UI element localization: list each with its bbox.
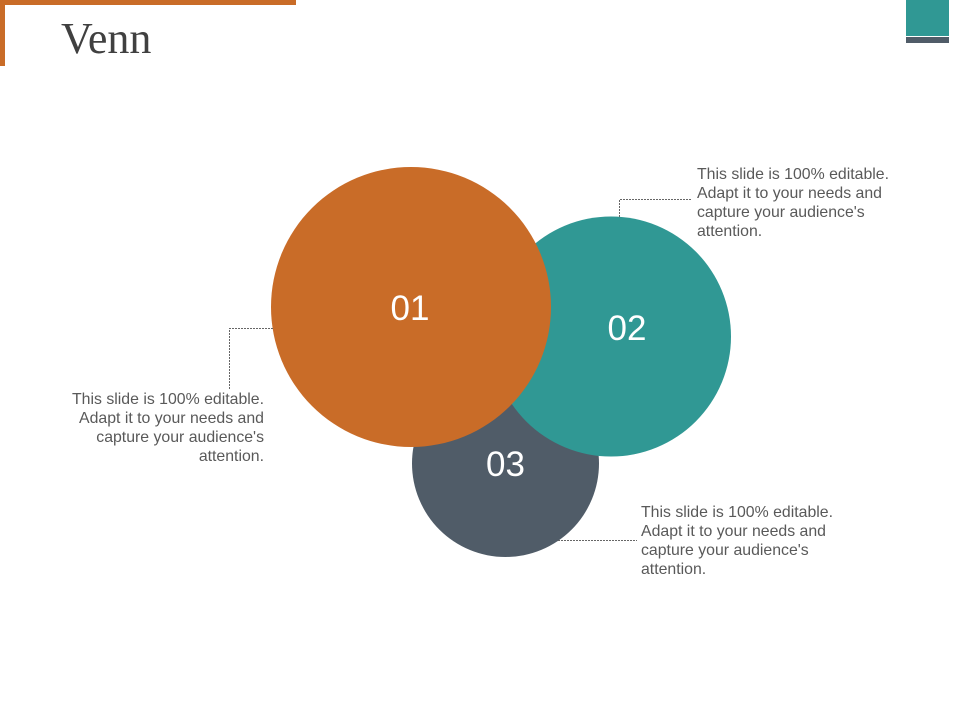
text block 02: This slide is 100% editable.	[697, 166, 889, 183]
circle 02	[491, 216, 731, 456]
text block 03: Adapt it to your needs and	[641, 523, 826, 540]
connector 02	[620, 200, 692, 217]
circle 01: 01	[391, 289, 429, 328]
connector 01	[230, 328, 273, 390]
text block 03: This slide is 100% editable.	[641, 504, 833, 521]
text block 01: capture your audience's	[96, 429, 264, 446]
title: Venn	[61, 14, 151, 63]
text block 02: attention.	[697, 223, 762, 240]
text block 01	[72, 391, 264, 465]
corner tab icon	[906, 0, 949, 43]
text block 02: capture your audience's	[697, 204, 865, 221]
connector 03	[558, 540, 637, 542]
text block 03: attention.	[641, 561, 706, 578]
header accent bracket	[0, 0, 296, 66]
circle 01	[271, 167, 551, 447]
text block 02	[697, 166, 889, 240]
text block 03: capture your audience's	[641, 542, 809, 559]
circle 03: 03	[486, 445, 525, 484]
text block 01: Adapt it to your needs and	[79, 410, 264, 427]
text block 01: attention.	[199, 448, 264, 465]
circle 03	[412, 370, 599, 557]
text block 02: Adapt it to your needs and	[697, 185, 882, 202]
text block 01: This slide is 100% editable.	[72, 391, 264, 408]
text block 03	[641, 504, 833, 578]
circle 02: 02	[608, 309, 646, 348]
